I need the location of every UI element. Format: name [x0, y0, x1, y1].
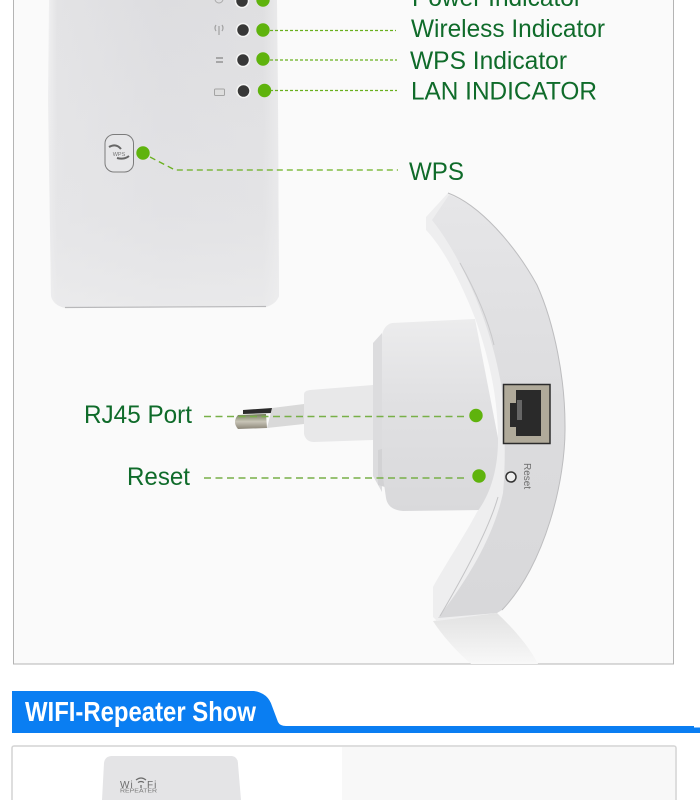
power plug	[235, 385, 373, 442]
icon: power	[215, 0, 223, 3]
callout labels: WPS Indicator	[410, 47, 567, 75]
reset hole	[506, 472, 516, 482]
icon: wps arrows	[216, 58, 223, 62]
device: front view top	[102, 756, 241, 800]
indicator lights	[236, 0, 250, 98]
reflection under side device	[433, 613, 538, 664]
callout labels: WPS	[409, 158, 464, 186]
rj45 port	[504, 384, 550, 444]
icon: lan	[214, 89, 224, 96]
panel: repeater show	[12, 746, 676, 800]
housing	[373, 333, 382, 492]
callout labels: Reset	[127, 463, 190, 491]
section heading: WIFI-Repeater Show	[12, 691, 700, 733]
callout lines	[150, 30, 465, 478]
device: side view	[235, 193, 565, 621]
panel: product details	[14, 0, 674, 664]
callout labels: Wireless Indicator	[411, 15, 605, 43]
callout labels: RJ45 Port	[84, 401, 192, 429]
wps button	[105, 134, 134, 172]
logo text: Wi	[120, 780, 134, 791]
callout labels: LAN INDICATOR	[411, 78, 597, 106]
wps button: WPS	[113, 152, 126, 158]
callout dots	[136, 0, 486, 483]
repeater text: REPEATER	[120, 788, 158, 794]
icon: wireless	[215, 25, 223, 35]
callout labels	[84, 0, 605, 491]
reset label: Reset	[521, 463, 532, 489]
device: front view top: Fi	[147, 780, 157, 791]
curved antenna	[426, 193, 565, 621]
icon: wifi	[136, 778, 146, 788]
section heading: WIFI-Repeater Show: WIFI-Repeater Show	[25, 696, 256, 727]
device: front view	[48, 0, 279, 308]
